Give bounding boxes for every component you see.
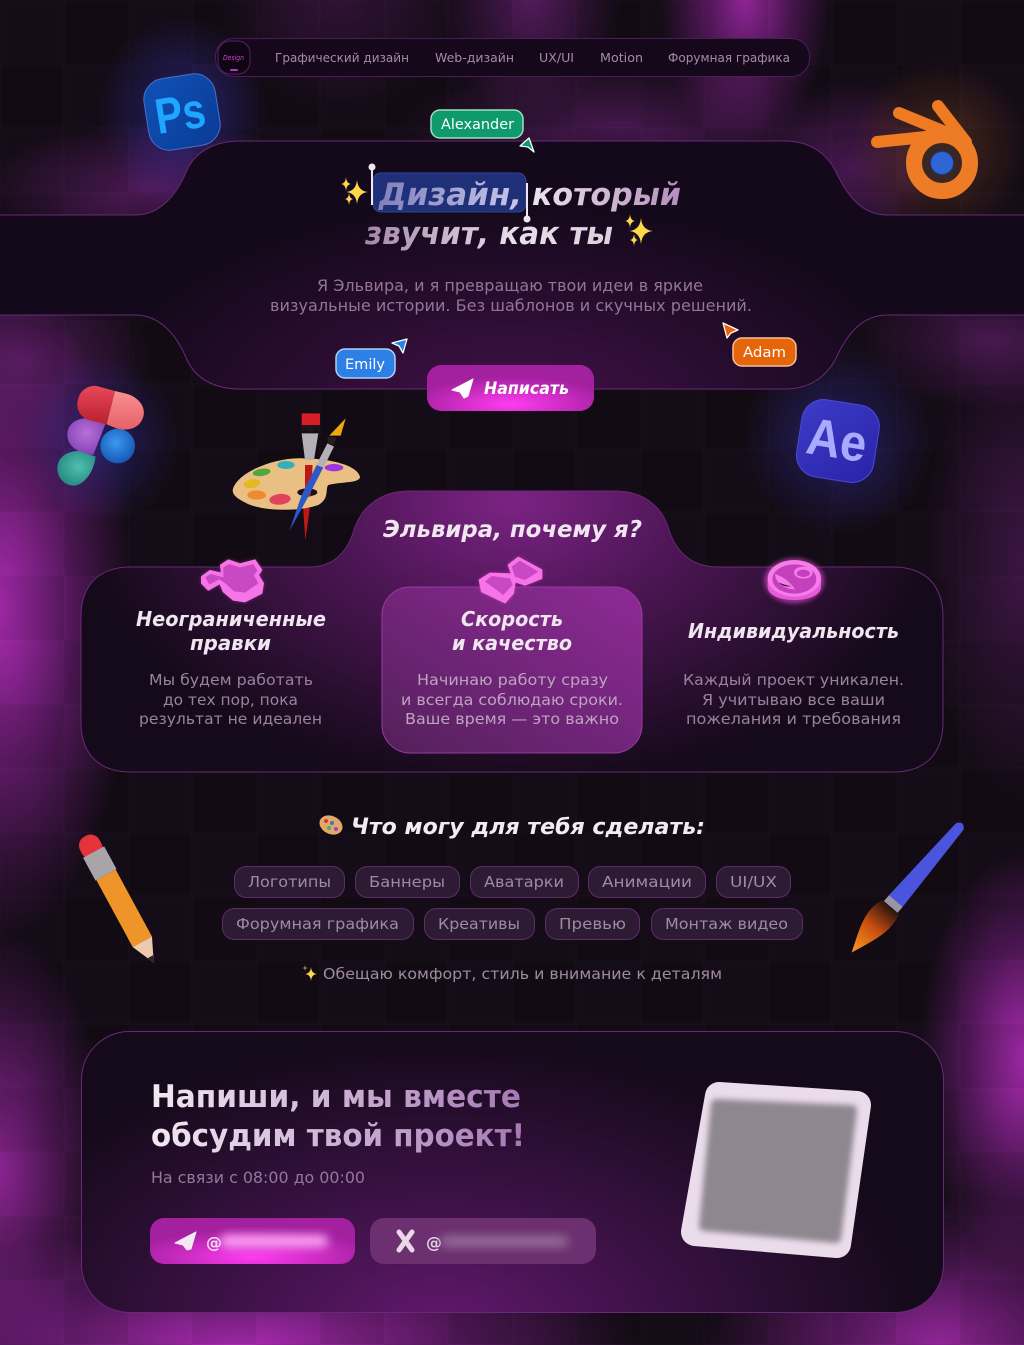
card title: и качество: [452, 631, 572, 655]
icon: sparkles right: [625, 214, 653, 246]
navigation bar: [216, 38, 810, 76]
red handle behind: [303, 460, 313, 540]
cursor: Adam: [723, 323, 796, 366]
text selection highlight: [368, 164, 530, 222]
title text: [364, 177, 681, 252]
blurred handle: [440, 1236, 568, 1247]
button: write: Написать: [484, 379, 569, 398]
card 3: individuality: [683, 619, 904, 728]
headline: [341, 164, 681, 252]
card title: [452, 607, 572, 655]
contact heading: обсудим твой проект!: [151, 1118, 525, 1154]
icon: paint brush: [841, 815, 972, 961]
chip: Логотипы: [248, 873, 331, 891]
nav links: [275, 50, 790, 65]
icon: palette with brushes: [233, 413, 360, 540]
icon: puzzle: [202, 560, 263, 602]
title text: звучит, как ты: [364, 216, 613, 252]
chip: Баннеры: [369, 873, 445, 891]
card body: Я учитываю все ваши: [702, 691, 885, 709]
chip: [652, 908, 802, 940]
icon: paper plane: [452, 379, 473, 398]
card body: результат не идеален: [139, 710, 322, 728]
cursor: Alexander: Alexander: [441, 117, 514, 133]
card body: Мы будем работать: [149, 671, 313, 689]
icon: pencil: [74, 831, 164, 969]
icon: Adobe After Effects: [793, 396, 882, 486]
title text: Дизайн,: [378, 177, 522, 213]
chip: Форумная графика: [236, 915, 399, 933]
card title: [136, 607, 326, 655]
panel: contact: [82, 1032, 944, 1312]
card body: [401, 671, 623, 728]
button: forum contact: @: [426, 1233, 442, 1252]
icon: bow shape: [479, 557, 542, 603]
card body: и всегда соблюдаю сроки.: [401, 691, 623, 709]
hero subtitle: [270, 276, 752, 315]
nav links: UX/UI: [539, 50, 574, 65]
card body: Ваше время — это важно: [405, 710, 619, 728]
card body: Начинаю работу сразу: [417, 671, 608, 689]
button: telegram contact: [150, 1218, 355, 1264]
card body: пожелания и требования: [686, 710, 901, 728]
icon: Photoshop: Ps: [151, 82, 209, 145]
chip: [546, 908, 640, 940]
nav links: Motion: [600, 50, 643, 65]
icon: Blender: [877, 106, 970, 191]
chip: Креативы: [438, 915, 520, 933]
title text: который: [532, 177, 681, 213]
nav links: Форумная графика: [668, 50, 790, 65]
chip: Превью: [559, 915, 626, 933]
chip: [716, 866, 790, 898]
nav logo: Design: [223, 54, 244, 62]
card 1: unlimited edits: [136, 607, 326, 728]
button: write: [427, 365, 594, 411]
card: highlighted: [382, 587, 642, 753]
chip: [588, 866, 706, 898]
chip: [424, 908, 534, 940]
chip: Аватарки: [484, 873, 564, 891]
panel: hero: [0, 141, 1024, 389]
icon: paper plane: [175, 1232, 196, 1250]
heading: services: Что могу для тебя сделать:: [351, 815, 705, 840]
chip: Монтаж видео: [665, 915, 788, 933]
chip: [234, 866, 344, 898]
contact heading: Напиши, и мы вместе: [151, 1079, 521, 1115]
hero subtitle: Я Эльвира, и я превращаю твои идеи в яркие: [317, 276, 703, 295]
icon: cross tools: [399, 1232, 412, 1250]
chip: UI/UX: [730, 873, 777, 891]
icon: round coin: [764, 558, 824, 603]
card body: [139, 671, 322, 728]
card body: Каждый проект уникален.: [683, 671, 904, 689]
cursor: Emily: [336, 339, 407, 378]
chip: [470, 866, 578, 898]
cursor: Emily: Emily: [345, 357, 385, 373]
chip: [222, 908, 414, 940]
cursor: Adam: Adam: [743, 345, 786, 361]
card 2: speed and quality: [401, 607, 623, 728]
nav links: Web-дизайн: [435, 50, 514, 65]
contact heading: [151, 1079, 525, 1154]
chip: [356, 866, 460, 898]
cursor: Alexander: [431, 110, 534, 152]
blurred photo card: [695, 1096, 857, 1244]
icon: Photoshop: [141, 71, 223, 153]
blurred handle: [220, 1235, 328, 1247]
icon: Adobe After Effects: Ae: [803, 407, 871, 474]
promise note: Обещаю комфорт, стиль и внимание к деталям: [323, 965, 722, 983]
button: telegram contact: @: [206, 1233, 222, 1252]
card title: Неограниченные: [136, 607, 326, 631]
contact hours: На связи с 08:00 до 00:00: [151, 1168, 365, 1187]
service chips: [222, 866, 802, 940]
icon: small sparkle: [302, 965, 317, 981]
card title: Индивидуальность: [688, 619, 899, 643]
button: forum contact: [370, 1218, 596, 1264]
card title: Скорость: [461, 607, 563, 631]
card body: до тех пор, пока: [163, 691, 298, 709]
icon: Figma: [57, 386, 144, 486]
hero subtitle: визуальные истории. Без шаблонов и скучных решений.: [270, 296, 752, 315]
chip: Анимации: [602, 873, 692, 891]
card body: [683, 671, 904, 728]
nav links: Графический дизайн: [275, 50, 409, 65]
panel: why me: [81, 491, 943, 772]
nav logo: [218, 41, 250, 74]
card title: правки: [190, 631, 271, 655]
palette board: [233, 458, 360, 510]
heading: why me: Эльвира, почему я?: [383, 517, 642, 543]
icon: sparkles left: [341, 177, 368, 205]
icon: small palette: [316, 812, 346, 838]
blue brush: [289, 465, 323, 531]
